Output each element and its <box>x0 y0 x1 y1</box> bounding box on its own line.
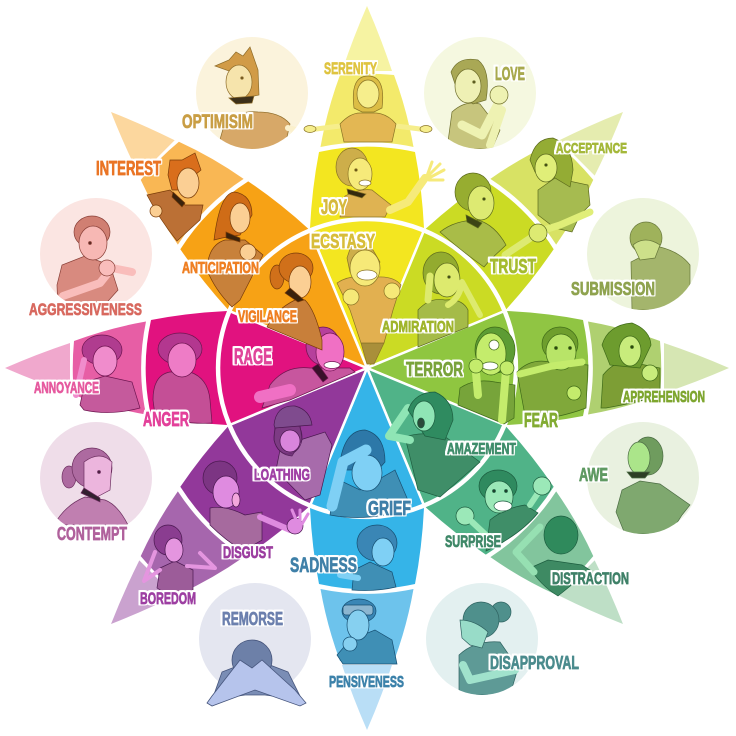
circle: remorse <box>199 583 311 706</box>
petal: blue sadness <box>310 368 424 730</box>
label: AMAZEMENT: AMAZEMENT <box>447 441 516 458</box>
label: BOREDOM: BOREDOM <box>140 589 196 608</box>
figure: rage <box>260 327 355 408</box>
label: GRIEF: GRIEF <box>368 498 411 520</box>
label: FEAR: FEAR <box>524 410 558 432</box>
figure: pensiveness <box>337 599 397 664</box>
label: ANNOYANCE: ANNOYANCE <box>34 380 99 397</box>
circle: submission <box>587 198 699 310</box>
figure: acceptance <box>530 138 590 232</box>
label: SADNESS: SADNESS <box>290 554 357 577</box>
label: SERENITY: SERENITY <box>324 59 377 78</box>
label: DISAPPROVAL: DISAPPROVAL <box>490 653 579 673</box>
figure: interest <box>147 153 203 241</box>
label: ANGER: ANGER <box>143 409 189 431</box>
figure: fear <box>517 327 588 421</box>
figure: apprehension <box>601 323 660 408</box>
circle: disapproval <box>426 583 538 695</box>
label: AWE: AWE <box>579 465 608 485</box>
figure: terror <box>458 327 515 424</box>
petal: magenta anger <box>5 311 367 425</box>
label: ECSTASY: ECSTASY <box>311 231 375 253</box>
figure: sadness <box>340 525 397 591</box>
label: AGGRESSIVENESS: AGGRESSIVENESS <box>29 300 142 319</box>
figure: boredom <box>144 525 215 596</box>
figure: ecstasy <box>337 243 401 364</box>
label: PENSIVENESS: PENSIVENESS <box>329 674 404 691</box>
label: ANTICIPATION: ANTICIPATION <box>182 260 259 277</box>
label: TRUST: TRUST <box>490 256 536 278</box>
figure: anticipation <box>207 192 263 307</box>
figure: grief <box>330 430 410 518</box>
figure: vigilance <box>267 253 322 350</box>
figure: annoyance <box>76 335 140 413</box>
petal: yellow joy <box>310 6 424 368</box>
figure: loathing <box>274 406 332 500</box>
figure: anger <box>153 333 212 423</box>
petal: green fear <box>367 311 729 425</box>
figure: trust <box>440 173 547 267</box>
label: LOATHING: LOATHING <box>254 467 310 484</box>
circle: awe <box>587 422 699 534</box>
figure: disgust <box>203 461 308 551</box>
figure: joy <box>336 148 444 217</box>
figure: surprise <box>456 470 551 551</box>
circle: love <box>424 37 536 149</box>
circle: contempt <box>40 422 152 534</box>
label: ACCEPTANCE: ACCEPTANCE <box>556 140 627 157</box>
label: JOY: JOY <box>321 196 347 219</box>
circle: aggressiveness <box>40 198 152 310</box>
label: CONTEMPT: CONTEMPT <box>57 524 127 544</box>
petal: teal surprise <box>327 328 663 664</box>
label: SURPRISE: SURPRISE <box>445 532 501 551</box>
label: VIGILANCE: VIGILANCE <box>238 307 297 326</box>
circle: optimism <box>196 37 308 150</box>
label: SUBMISSION: SUBMISSION <box>571 279 655 299</box>
label: ADMIRATION: ADMIRATION <box>382 319 454 336</box>
label: OPTIMISIM: OPTIMISIM <box>182 112 253 133</box>
label: DISTRACTION: DISTRACTION <box>552 569 629 588</box>
petal: purple disgust <box>71 328 407 664</box>
figure: amazement <box>389 392 480 497</box>
label: RAGE: RAGE <box>234 344 272 369</box>
figure: admiration <box>418 252 480 347</box>
label: DISGUST: DISGUST <box>223 543 273 562</box>
figure: distraction <box>516 516 590 596</box>
label: REMORSE: REMORSE <box>222 609 283 629</box>
figure: serenity <box>304 76 432 142</box>
label: LOVE: LOVE <box>495 64 525 84</box>
label: TERROR: TERROR <box>406 359 463 381</box>
petal: lime trust <box>327 72 663 408</box>
label: INTEREST: INTEREST <box>96 158 161 180</box>
petal: orange anticipation <box>71 72 407 408</box>
